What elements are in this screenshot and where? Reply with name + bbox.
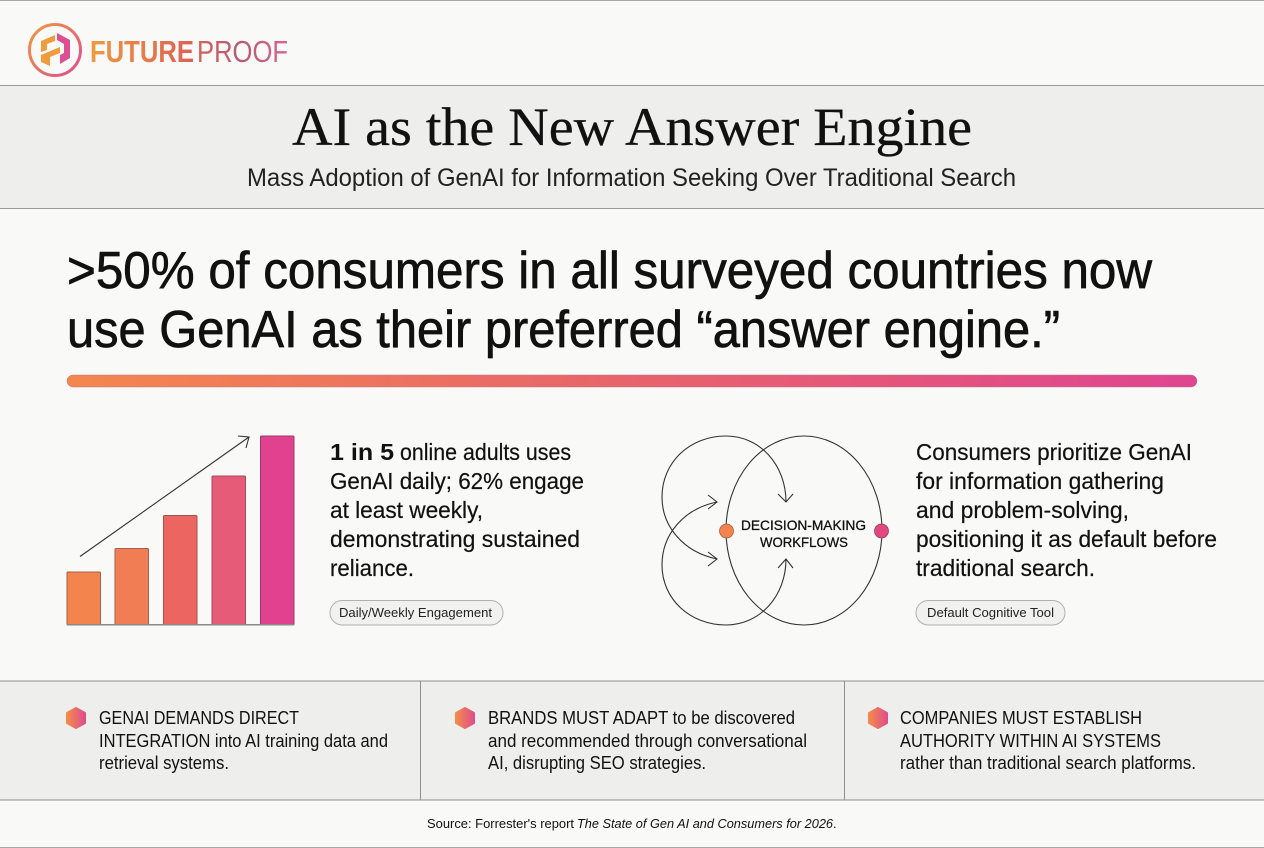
node: pink (874, 524, 888, 538)
logo wordmark: PROOF (197, 34, 288, 69)
arrow: lower left loop (662, 495, 793, 625)
title: AI as the New Answer Engine (292, 97, 972, 157)
logo wordmark: FUTURE (90, 34, 194, 69)
implication text (488, 708, 807, 773)
subtitle: Mass Adoption of GenAI for Information Seeking Over Traditional Search (247, 164, 1016, 192)
tag: Default Cognitive Tool (916, 600, 1065, 625)
implication: direct integration (67, 708, 388, 773)
tag: Daily/Weekly Engagement (330, 600, 503, 625)
implication text (99, 708, 388, 773)
text block: daily engagement: GenAI daily; 62% engage (330, 468, 584, 494)
implication: establish authority (869, 708, 1196, 773)
diagram: decision-making workflows (662, 436, 888, 625)
node: orange (720, 524, 734, 538)
large loop (726, 436, 882, 625)
implication: brands must adapt (456, 708, 807, 773)
panel: title band (0, 85, 1264, 209)
text block: default before search (916, 439, 1217, 581)
icon: hexagon (869, 708, 887, 728)
headline statistic: >50% of consumers in all surveyed countries now (67, 242, 1152, 300)
icon: hexagon (67, 708, 85, 728)
tag: Daily/Weekly Engagement: Daily/Weekly Engagement (339, 605, 492, 620)
tag: Default Cognitive Tool: Default Cognitive Tool (927, 605, 1054, 620)
source note: The State of Gen AI and Consumers for 2026 (577, 817, 833, 831)
text block: default before search: Consumers prioritize GenAI (916, 439, 1192, 465)
implication text: AI, disrupting SEO strategies. (488, 753, 706, 773)
text block: default before search: positioning it as default before (916, 526, 1217, 552)
logo: Futureproof (30, 24, 288, 76)
implication text: and recommended through conversational (488, 731, 807, 751)
text block: daily engagement: at least weekly, (330, 497, 483, 523)
implication text (900, 708, 1196, 773)
source note (427, 817, 836, 831)
diagram label (741, 517, 866, 550)
text block: daily engagement: online adults uses (400, 439, 571, 465)
implication text: COMPANIES MUST ESTABLISH (900, 708, 1142, 728)
gradient divider bar (67, 375, 1197, 387)
arrow: upper left loop (662, 436, 793, 566)
text block: default before search: for information gathering (916, 468, 1164, 494)
implication text: INTEGRATION into AI training data and (99, 731, 388, 751)
implication text: rather than traditional search platforms. (900, 753, 1196, 773)
panel: implications strip (0, 680, 1264, 800)
source note: Source: Forrester's report (427, 817, 575, 831)
text block: default before search: and problem-solving, (916, 497, 1129, 523)
text block: daily engagement: reliance. (330, 555, 414, 581)
diagram label: DECISION-MAKING (741, 517, 866, 533)
headline statistic (67, 242, 1152, 359)
implication text: GENAI DEMANDS DIRECT (99, 708, 299, 728)
icon: logo ring and hexagon mark (30, 24, 80, 76)
text block: daily engagement: 1 in 5 (330, 439, 394, 465)
source note: . (833, 817, 836, 831)
bar chart: rising engagement (67, 436, 294, 626)
implication text: retrieval systems. (99, 753, 229, 773)
text block: daily engagement (330, 439, 584, 581)
arrow: upward trend (80, 436, 249, 556)
text block: default before search: traditional search. (916, 555, 1095, 581)
logo wordmark (90, 34, 288, 69)
headline statistic: use GenAI as their preferred “answer engine.” (67, 301, 1060, 359)
implication text: BRANDS MUST ADAPT to be discovered (488, 708, 795, 728)
implication text: AUTHORITY WITHIN AI SYSTEMS (900, 731, 1161, 751)
diagram label: WORKFLOWS (760, 534, 848, 550)
text block: daily engagement: demonstrating sustained (330, 526, 580, 552)
icon: hexagon (456, 708, 474, 728)
